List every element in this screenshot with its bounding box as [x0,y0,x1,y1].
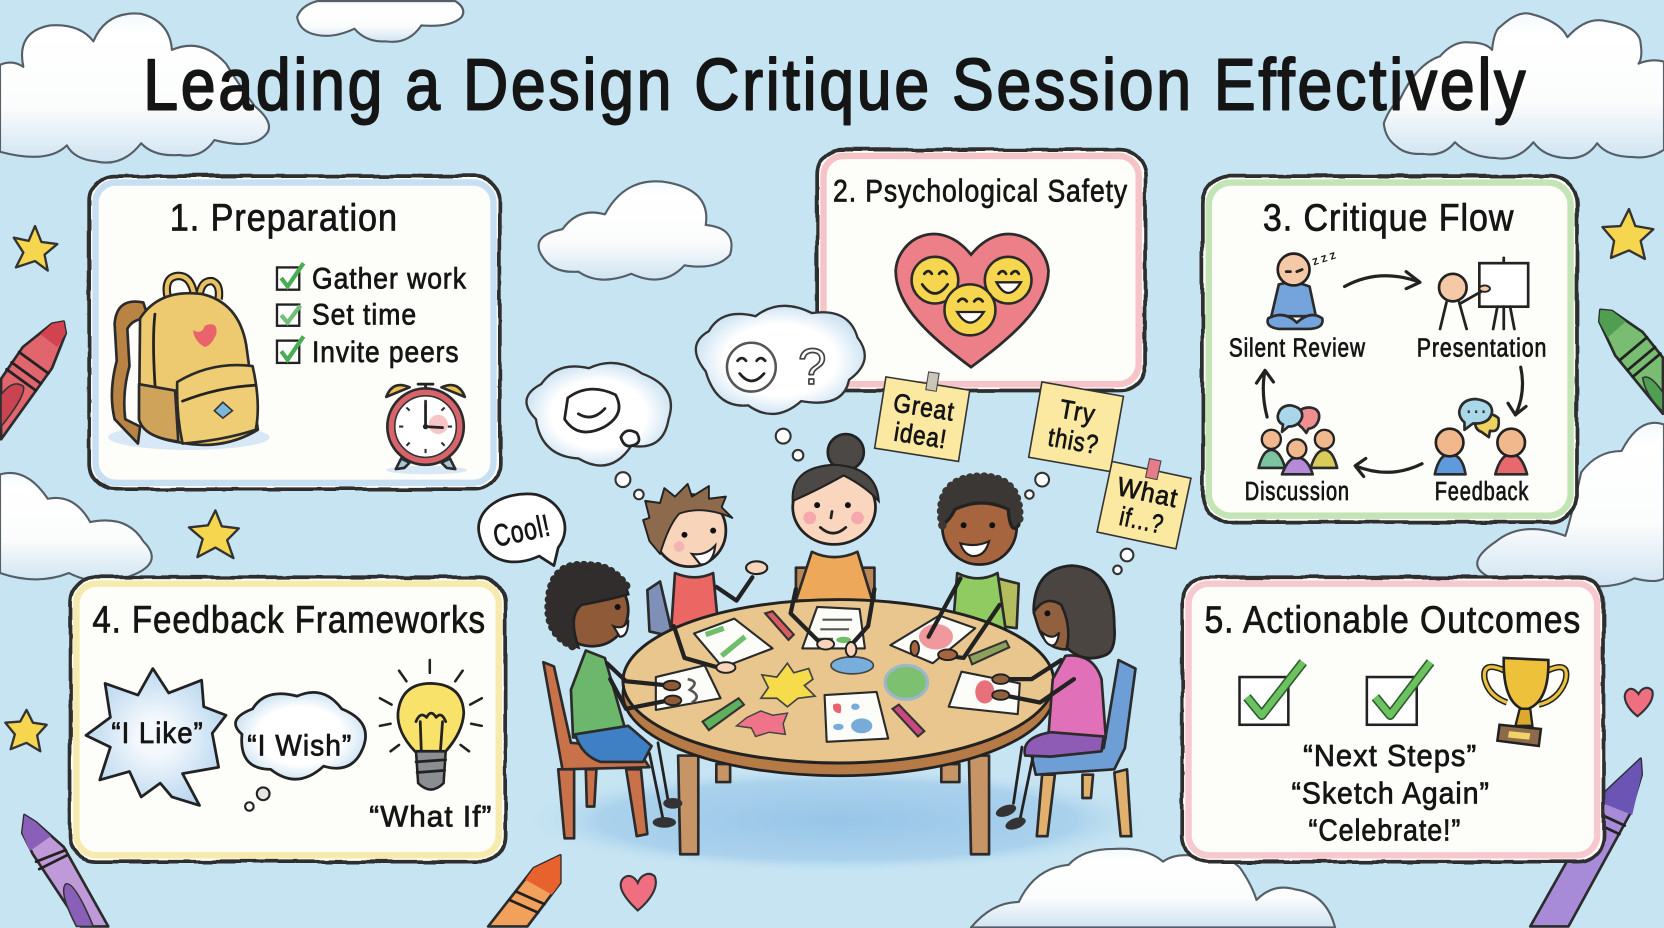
sticky note: great idea [875,365,972,461]
floor shading [520,767,1157,873]
speech bubble: cool: Cool! [490,508,553,554]
checklist [277,263,467,369]
child: curly left [549,565,682,828]
thought cloud: i wish [235,692,366,811]
sticky note: great idea: idea! [892,417,949,455]
crayon: green [1599,310,1663,414]
speech bubble: cool [479,494,565,566]
child: long hair right [992,566,1115,832]
sticky note: great idea: Great [891,388,957,427]
icon: silent review [1268,248,1338,329]
teacher [793,434,879,601]
arrow: feedback to discussion [1355,458,1422,476]
icon: presentation [1439,258,1528,329]
icon: heart with smiling faces [896,234,1048,367]
checklist: Gather work [312,263,467,296]
sticky note: try this: this? [1046,422,1101,460]
thought bubbles: right dots [1025,473,1133,574]
arrow: discussion to silent review [1256,370,1273,417]
outcomes list: “Next Steps” [1303,738,1477,773]
chair: right blue [1032,660,1136,836]
thought bubble: center [696,306,865,461]
table [623,600,1054,854]
panel: 3. Critique Flow [1202,176,1577,522]
icon: light bulb [380,660,482,790]
heading: feedback frameworks: 4. Feedback Frameworks [92,598,486,641]
child: brown hair [643,484,767,637]
panel: 1. Preparation [89,176,500,489]
child: curly right [941,476,1019,632]
sticky note: what if [1097,451,1193,549]
icon: checkboxes [1240,662,1431,725]
heading: preparation: 1. Preparation [170,196,398,239]
checklist: Invite peers [312,336,460,369]
icon: feedback [1435,399,1527,474]
sticky note: what if: if...? [1117,501,1167,540]
papers and crayons on table [656,607,1020,742]
flow labels: Presentation [1417,335,1547,363]
label: what if: “What If” [369,801,492,834]
icon: silent review: z z z [1311,248,1338,268]
arrow: silent review to presentation [1345,272,1420,289]
crayon: red [1,322,66,439]
sticky note: what if: What [1115,471,1181,513]
thought bubble: center: ? [798,338,827,395]
heading: psychological safety: 2. Psychological Safety [833,173,1128,209]
icon: backpack [108,276,270,450]
burst: i like [86,669,226,805]
outcomes list: “Sketch Again” [1292,775,1490,810]
arrow: presentation to feedback [1508,367,1526,415]
burst: i like: “I Like” [111,717,204,750]
flow labels: Silent Review [1229,335,1366,363]
flow labels: Discussion [1245,478,1350,506]
heading: actionable outcomes: 5. Actionable Outcomes [1204,598,1581,641]
crayon: purple left [22,815,108,926]
sticky note: try this: Try [1057,394,1098,429]
outcomes list: “Celebrate!” [1308,812,1461,847]
icon: alarm clock [386,384,467,474]
thought bubble: left [526,363,671,499]
heading: critique flow: 3. Critique Flow [1263,196,1514,239]
checklist: Set time [312,299,417,332]
panel: 4. Feedback Frameworks [70,577,505,862]
thought cloud: i wish: “I Wish” [247,730,352,763]
flow labels [1229,335,1547,506]
icon: discussion [1259,405,1337,474]
flow labels: Feedback [1435,478,1529,506]
decorative hearts [621,688,1653,910]
chair: left orange [543,662,649,838]
outcomes list [1292,738,1490,847]
panel: 5. Actionable Outcomes [1182,577,1604,862]
arms reaching to papers [674,578,1000,673]
sticky note: try this [1029,382,1123,472]
panel: 2. Psychological Safety [817,150,1145,391]
decorative stars [5,209,1653,751]
icon: trophy [1484,658,1566,746]
crayon: purple right [1530,759,1642,926]
illustration: children around table [520,434,1157,873]
crayon: orange [488,855,560,926]
